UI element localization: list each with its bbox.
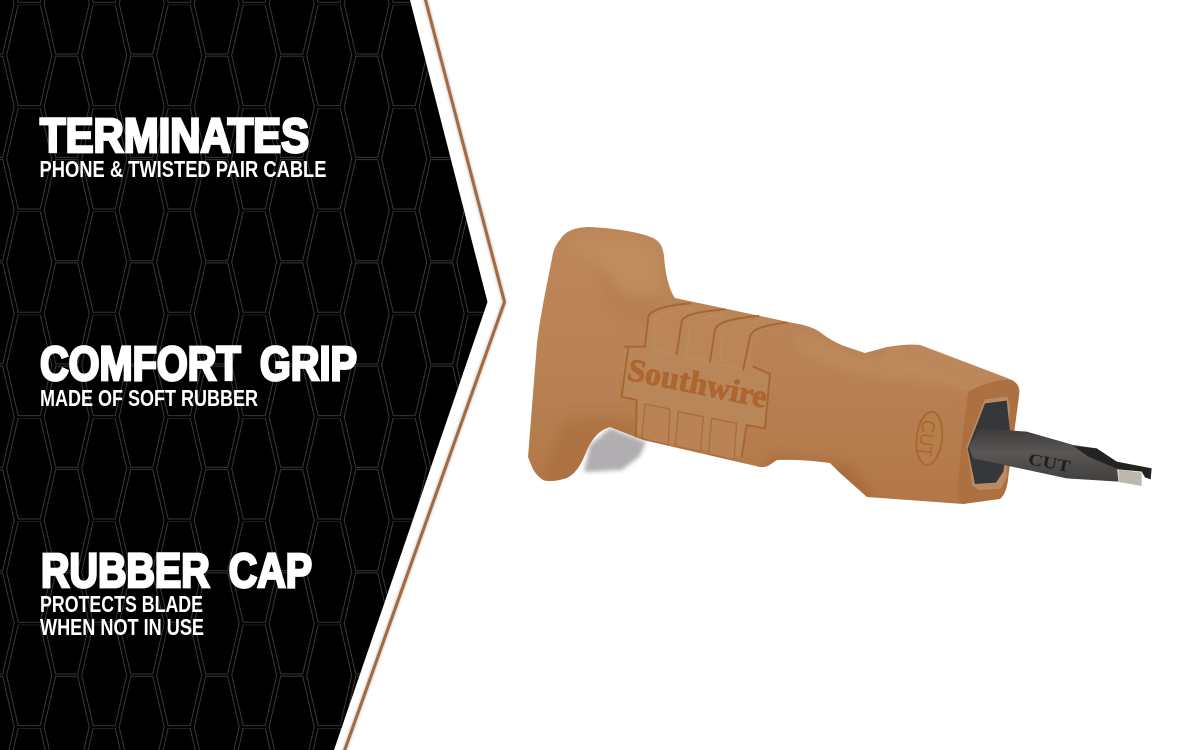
panel groove lines	[622, 303, 787, 457]
handle body	[528, 227, 1019, 504]
feature: rubber cap	[40, 544, 312, 640]
cap CUT oval	[914, 410, 945, 466]
recessed grip panel	[622, 303, 788, 457]
subtext: when not in use: WHEN NOT IN USE	[40, 614, 204, 640]
product: punch-down tool	[528, 227, 1152, 505]
heading: rubber cap: RUBBER CAP	[41, 544, 312, 598]
blade shank	[968, 428, 1118, 482]
rubber cap details	[880, 345, 1152, 504]
cap opening	[968, 401, 1010, 484]
feature: comfort grip	[40, 337, 357, 411]
cap top facet	[880, 345, 1008, 392]
blade silver edge	[1118, 469, 1142, 486]
panel: black chevron with hexagon pattern	[0, 0, 488, 750]
blade tip	[1073, 446, 1152, 479]
cap opening rim	[967, 397, 1010, 490]
logo text: Southwire	[625, 351, 771, 415]
grip panel with ribs and logo	[622, 303, 788, 460]
subtext: protects blade: PROTECTS BLADE	[40, 591, 203, 617]
upper rib pads	[653, 308, 758, 369]
feature: terminates	[40, 109, 326, 182]
cap front face	[957, 379, 1019, 504]
cap CUT label: CUT	[913, 419, 938, 459]
subtext: soft rubber: MADE OF SOFT RUBBER	[40, 385, 258, 411]
lower rib pads	[642, 404, 737, 460]
heading: terminates: TERMINATES	[40, 109, 309, 163]
handle shading	[540, 240, 1000, 505]
heading: comfort grip: COMFORT GRIP	[40, 337, 357, 391]
subtext: phone cable: PHONE & TWISTED PAIR CABLE	[40, 156, 326, 182]
blade CUT label: CUT	[1027, 449, 1072, 476]
brown chevron line	[344, 0, 504, 750]
ground shadow	[584, 428, 646, 472]
